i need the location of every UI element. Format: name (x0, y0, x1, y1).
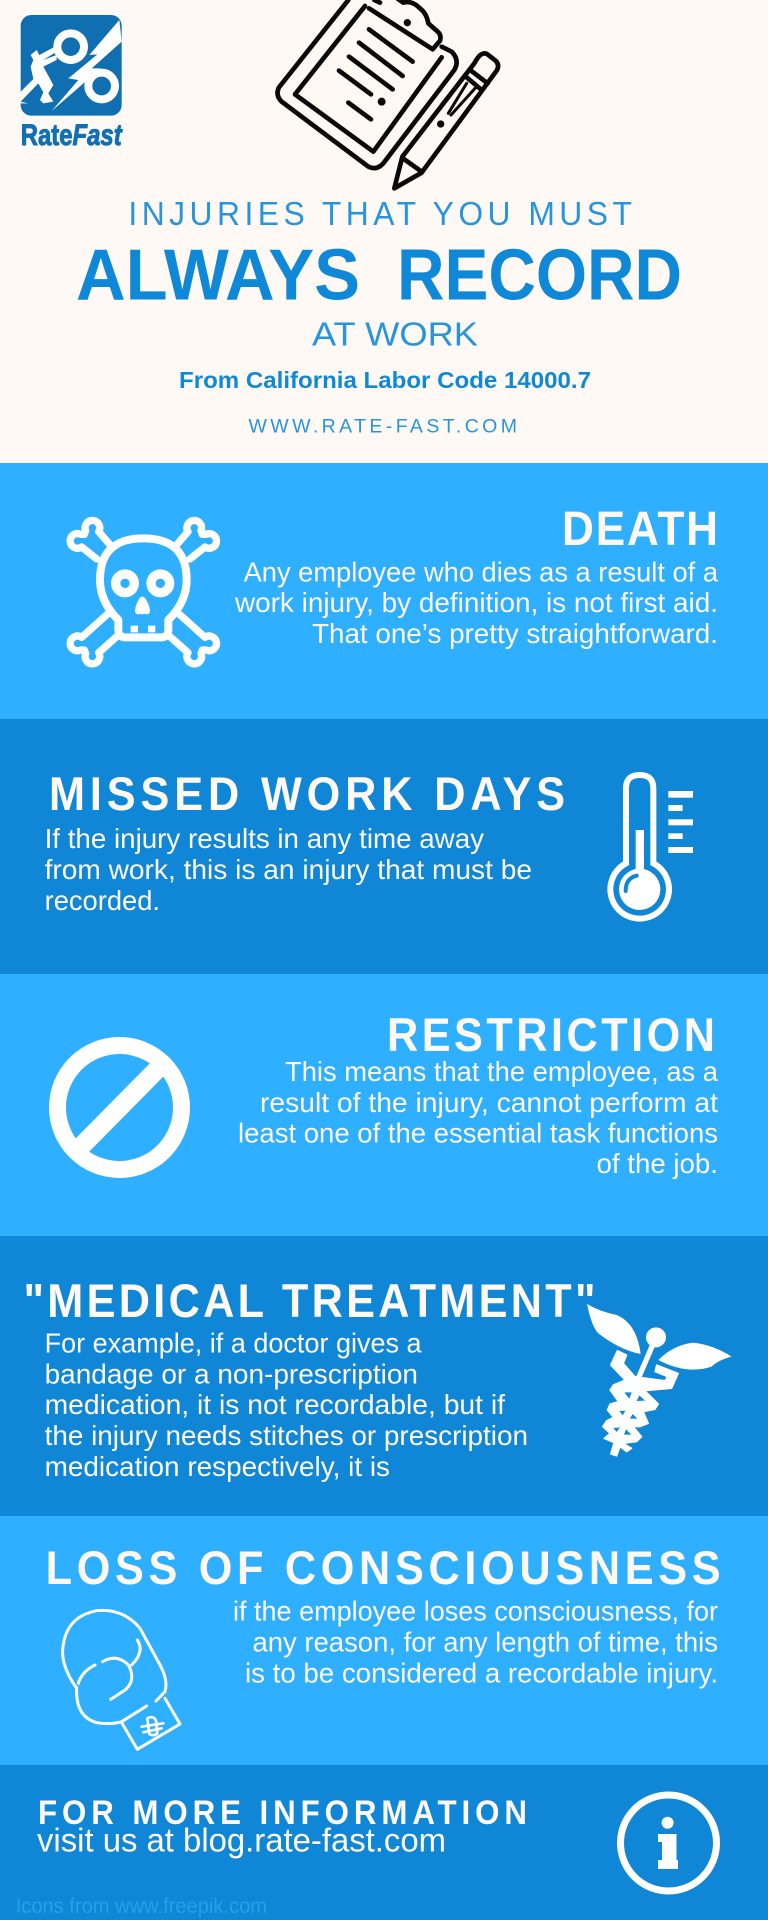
heading: at work: AT WORK (312, 316, 478, 353)
text: restriction description: least one of the essential task functions (238, 1118, 718, 1148)
icon: information (620, 1795, 716, 1891)
heading: always record: RECORD (397, 236, 682, 316)
text: medical treatment description (45, 1328, 528, 1482)
icon: RateFast logo: RateFast (21, 119, 123, 152)
icon: skull and crossbones (70, 520, 216, 664)
heading: always record: ALWAYS (76, 236, 360, 316)
icon: boxing glove (63, 1610, 180, 1749)
heading: always record (76, 236, 682, 316)
icon: RateFast logo (20, 15, 123, 152)
heading: for more information: FOR MORE INFORMATION (38, 1793, 527, 1831)
text: death description: work injury, by definition, is not first aid. (234, 587, 718, 618)
text: loss of consciousness description: any reason, for any length of time, this (252, 1627, 718, 1658)
panel: header (0, 0, 768, 463)
text: restriction description: This means that the employee, as a (285, 1056, 718, 1087)
heading: restriction: RESTRICTION (387, 1008, 715, 1061)
text: loss of consciousness description (233, 1596, 718, 1689)
panel: death (0, 463, 768, 719)
panel: restriction (0, 974, 768, 1236)
text: missed work days description: If the injury results in any time away (45, 823, 484, 854)
icon: caduceus (587, 1304, 732, 1456)
text: loss of consciousness description: is to be considered a recordable injury. (245, 1658, 718, 1689)
text: medical treatment description: medication, it is not recordable, but if (45, 1389, 505, 1420)
text: medical treatment description: the injury needs stitches or prescription (45, 1420, 528, 1451)
panel: loss of consciousness (0, 1516, 768, 1765)
heading: loss of consciousness: LOSS OF CONSCIOUSNESS (46, 1541, 721, 1594)
text: medical treatment description: For example, if a doctor gives a (45, 1328, 422, 1359)
text: medical treatment description: medication respectively, it is (45, 1451, 390, 1482)
icon: clipboard and pencil (277, 0, 498, 188)
text: restriction description (238, 1056, 718, 1179)
text: missed work days description: from work, this is an injury that must be (45, 854, 532, 885)
text: blog link: visit us at blog.rate-fast.com (37, 1822, 446, 1859)
heading: medical treatment: "MEDICAL TREATMENT" (24, 1274, 595, 1327)
text: medical treatment description: bandage or a non-prescription (45, 1359, 418, 1390)
text: restriction description: of the job. (596, 1148, 718, 1179)
icon: thermometer (610, 775, 693, 919)
panel: medical treatment (0, 1236, 768, 1516)
text: missed work days description: recorded. (45, 885, 160, 916)
text: death description: That one’s pretty straightforward. (312, 618, 718, 649)
text: restriction description: result of the injury, cannot perform at (260, 1087, 718, 1118)
text: death description: Any employee who dies as a result of a (244, 557, 718, 588)
heading: missed work days: MISSED WORK DAYS (49, 767, 565, 820)
credit: icon source: Icons from www.freepik.com (16, 1894, 267, 1918)
heading: death: DEATH (562, 501, 718, 555)
text: death description (234, 557, 718, 649)
text: loss of consciousness description: if the employee loses consciousness, for (233, 1596, 718, 1627)
website link: WWW.RATE-FAST.COM (248, 416, 517, 438)
panel: for more information (0, 1765, 768, 1920)
panel: missed work days (0, 719, 768, 974)
text: missed work days description (45, 823, 532, 916)
subheading: source: From California Labor Code 14000.7 (179, 367, 591, 393)
icon: prohibition sign (58, 1046, 182, 1170)
heading: injuries that you must: INJURIES THAT YOU MUST (128, 194, 632, 232)
